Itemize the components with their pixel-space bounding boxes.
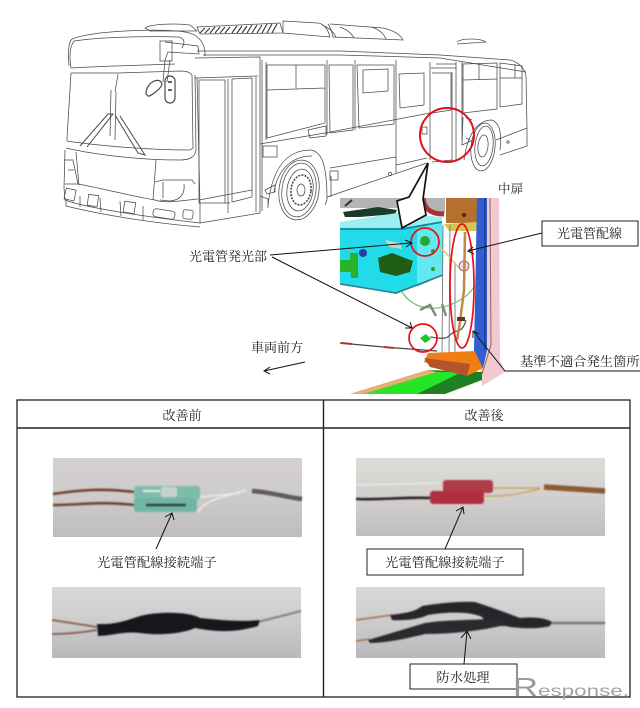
bus front face: [64, 30, 205, 227]
photo: before, exposed terminal: [53, 458, 302, 537]
red hose: [423, 198, 444, 214]
label: before terminal: 光電管配線接続端子: [97, 554, 217, 570]
brown bracket: [446, 198, 477, 223]
green harness: [402, 285, 475, 308]
label box: photo tube wiring: 光電管配線: [557, 226, 622, 241]
arrow: waterproofing: [461, 631, 471, 664]
arrow: after terminal: [445, 507, 464, 549]
watermark: Response: [513, 672, 629, 702]
bus front wheel: [268, 150, 327, 222]
label: non-conformance location: 基準不適合発生箇所: [520, 353, 640, 369]
cyan equipment box: [340, 213, 442, 229]
diagram: interior of middle door: [340, 198, 505, 394]
white interior: [340, 208, 477, 362]
arrow: wiring leader: [468, 233, 542, 254]
bus roof equipment: [145, 21, 486, 44]
arrow: before terminal: [156, 513, 174, 549]
header: before: 改善前: [162, 408, 202, 423]
label box: waterproofing: 防水処理: [436, 669, 490, 685]
green components: [378, 253, 413, 276]
watermark: Response: esponse.: [538, 683, 629, 700]
pink door edge: [478, 198, 505, 386]
label: middle door: 中扉: [498, 181, 523, 196]
arrows: emitter leaders: [270, 240, 412, 328]
frame rails: [442, 225, 455, 355]
illustration: bus line drawing: [64, 21, 527, 227]
red circle: door highlight on bus: [420, 108, 474, 162]
label box: after terminal: 光電管配線接続端子: [385, 554, 505, 570]
arrow: vehicle front direction: [264, 362, 305, 374]
arrow: non-conformance leader: [473, 331, 640, 371]
bus side body: [195, 51, 527, 223]
bus rear wheel: [464, 120, 501, 172]
brown wire: [457, 232, 465, 340]
photo: after, red terminals: [356, 458, 605, 536]
label box: after terminal: [367, 549, 523, 575]
header: after: 改善後: [464, 408, 504, 423]
green lamps: [420, 236, 430, 246]
photo: after, waterproofed: [356, 587, 605, 658]
label box: waterproofing: [410, 664, 517, 689]
floor rail: [340, 343, 437, 351]
bus wipers and mirrors: [80, 41, 199, 155]
green floor: [350, 370, 482, 394]
watermark: Response: R: [513, 672, 538, 702]
label: vehicle front: 車両前方: [251, 340, 303, 355]
orange step: [424, 351, 483, 376]
comparison table: [17, 400, 630, 697]
table grid: [17, 400, 630, 697]
red markers on diagram: [409, 224, 474, 352]
photo: before, taped: [52, 587, 301, 658]
blue pillar: [473, 198, 487, 368]
label: emitter: 光電管発光部: [189, 249, 267, 264]
white arrow from bus to diagram: [397, 163, 428, 228]
grey upper compartment: [340, 198, 445, 213]
dark parts on top of box: [343, 207, 397, 217]
label box: photo tube wiring: [542, 221, 638, 246]
